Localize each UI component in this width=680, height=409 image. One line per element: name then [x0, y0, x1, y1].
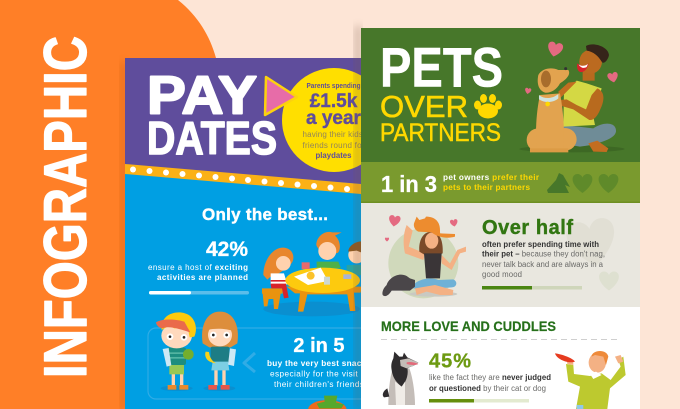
stat: 2 in 5: buy the very best snacks: [267, 359, 371, 368]
illustration: woman with cats: [382, 217, 466, 298]
header: purple band: [125, 58, 361, 184]
icons: hearts: [524, 41, 619, 94]
heading: PAY DATES: PAY: [147, 66, 257, 126]
stat: 45%: 45%: [429, 350, 471, 372]
text: 45% description: like the fact they are never judged: [429, 373, 551, 382]
band: 1 in 3: pets to their partners: [443, 183, 530, 192]
stat: 2 in 5: especially for the visit of: [270, 370, 369, 378]
callout: yellow circle: £1.5k: [310, 91, 358, 112]
icons: small hearts: [385, 215, 458, 242]
heading: Over half: Over half: [482, 217, 573, 239]
icon: chevron: [244, 353, 255, 372]
heading: OVER: OVER: [380, 89, 468, 124]
panel: 2 in 5 outline: [147, 327, 361, 400]
text: over half description: their pet – because they don't nag,: [482, 250, 605, 258]
text: over half description: never talk back and are always in a: [482, 260, 604, 269]
illustration: husky: [383, 352, 418, 405]
callout: yellow circle: playdates: [316, 151, 352, 160]
header: green band: [361, 28, 640, 162]
panel: Pay Dates poster: [125, 58, 361, 409]
band: 1 in 3: 1 in 3: [381, 171, 437, 197]
heading: PETS: PETS: [380, 36, 503, 98]
text: 45% description: or questioned by their cat or dog: [429, 384, 546, 393]
heading: Only the best: Only the best...: [202, 205, 328, 224]
panel: Over half: [361, 203, 640, 307]
heading: PAY DATES: [148, 76, 276, 156]
callout: yellow circle: having their kids': [302, 130, 365, 139]
callout: yellow circle: Parents spending: [306, 81, 361, 90]
illustration: boy with apple: [156, 312, 196, 391]
heading: PARTNERS: PARTNERS: [380, 119, 501, 147]
text: over half description: often prefer spending time with: [482, 240, 599, 249]
stat: 42%: [148, 238, 249, 294]
heading: PAY DATES: DATES: [147, 112, 277, 164]
illustration: man hugging dog: [519, 44, 625, 152]
illustration: children at table: [262, 232, 365, 316]
stat: 42%: activities are planned: [157, 273, 248, 282]
illustration: clown hat: [308, 396, 347, 409]
dotted ribbon: [125, 164, 361, 194]
band: 1 in 3: pet owners prefer their: [443, 173, 540, 182]
callout: yellow circle: [264, 68, 361, 172]
text: over half description: [482, 240, 605, 279]
illustration: girl with banana: [202, 312, 238, 391]
stat: 2 in 5: [268, 336, 361, 387]
icon: paw: [474, 94, 502, 118]
stat: 2 in 5: 2 in 5: [293, 335, 345, 357]
heading: More love and cuddles: MORE LOVE AND CUDDLES: [381, 319, 556, 334]
stat: 42%: ensure a host of exciting: [148, 263, 248, 272]
band: 1 in 3: [361, 162, 640, 203]
panel: Pets Over Partners poster: [361, 28, 640, 409]
illustration: man with frisbee: [555, 351, 626, 409]
progress bar: [482, 286, 582, 290]
stat: 42%: 42%: [206, 238, 248, 261]
callout: yellow circle: a year: [306, 108, 362, 129]
orange background panel: [0, 0, 225, 409]
progress bar: [429, 399, 529, 402]
text: over half description: good mood: [482, 270, 522, 279]
callout: yellow circle: friends round for: [302, 141, 365, 150]
stat: 2 in 5: their children's friends: [274, 380, 364, 389]
text: 45% description: [429, 373, 551, 393]
